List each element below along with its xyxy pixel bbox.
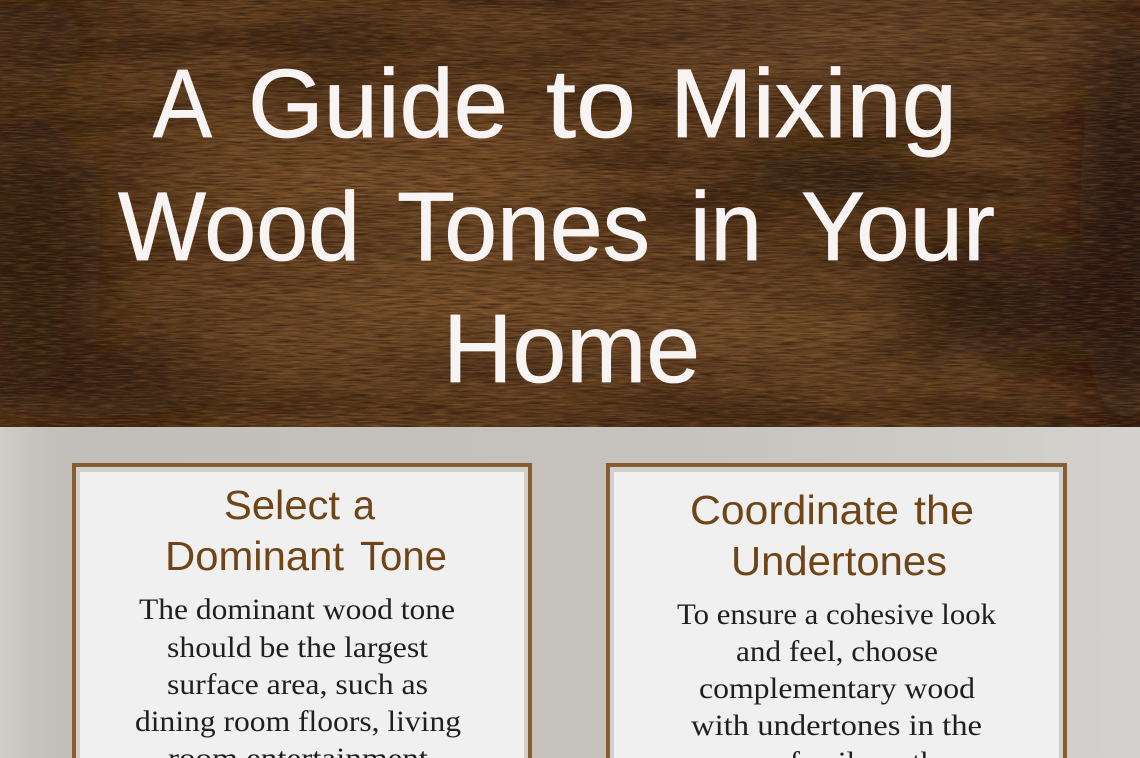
- title: Your: [801, 172, 995, 281]
- body text: undertones: [677, 598, 996, 758]
- heading: select a dominant tone: [165, 482, 447, 579]
- panel: coordinate the undertones: [606, 463, 1067, 758]
- wall background: [0, 427, 1140, 758]
- body text: dominant tone: should be the largest: [167, 631, 429, 664]
- body text: dominant tone: surface area, such as: [167, 668, 428, 701]
- body text: dominant tone: dining room floors, living: [135, 705, 461, 738]
- heading: select a dominant tone: Select: [224, 482, 341, 528]
- card frame: [72, 463, 532, 758]
- body text: undertones: with undertones in the: [691, 709, 982, 742]
- heading: coordinate the undertones: Undertones: [731, 538, 947, 584]
- title: Home: [443, 294, 700, 403]
- title: Guide: [248, 49, 508, 158]
- title: Tones: [397, 172, 650, 281]
- body text: dominant tone: The dominant wood tone: [139, 593, 455, 626]
- header: wood background: [0, 0, 1140, 450]
- heading: select a dominant tone: Dominant: [165, 533, 345, 579]
- heading: select a dominant tone: Tone: [360, 533, 447, 579]
- body text: undertones: To ensure a cohesive look: [677, 598, 996, 631]
- body text: undertones: complementary wood: [699, 672, 975, 705]
- title: to: [546, 49, 636, 158]
- card frame: [606, 463, 1067, 758]
- body text: dominant tone: [135, 593, 461, 758]
- heading: coordinate the undertones: Coordinate: [690, 487, 899, 533]
- title: [118, 49, 995, 403]
- heading: coordinate the undertones: the: [914, 487, 974, 533]
- body text: undertones: and feel, choose: [736, 635, 938, 668]
- heading: coordinate the undertones: [690, 487, 974, 584]
- title: in: [690, 172, 762, 281]
- title: Mixing: [670, 49, 957, 158]
- title: Wood: [118, 172, 360, 281]
- title: A: [153, 49, 212, 158]
- panel: select a dominant tone: [72, 463, 532, 758]
- heading: select a dominant tone: a: [353, 482, 375, 528]
